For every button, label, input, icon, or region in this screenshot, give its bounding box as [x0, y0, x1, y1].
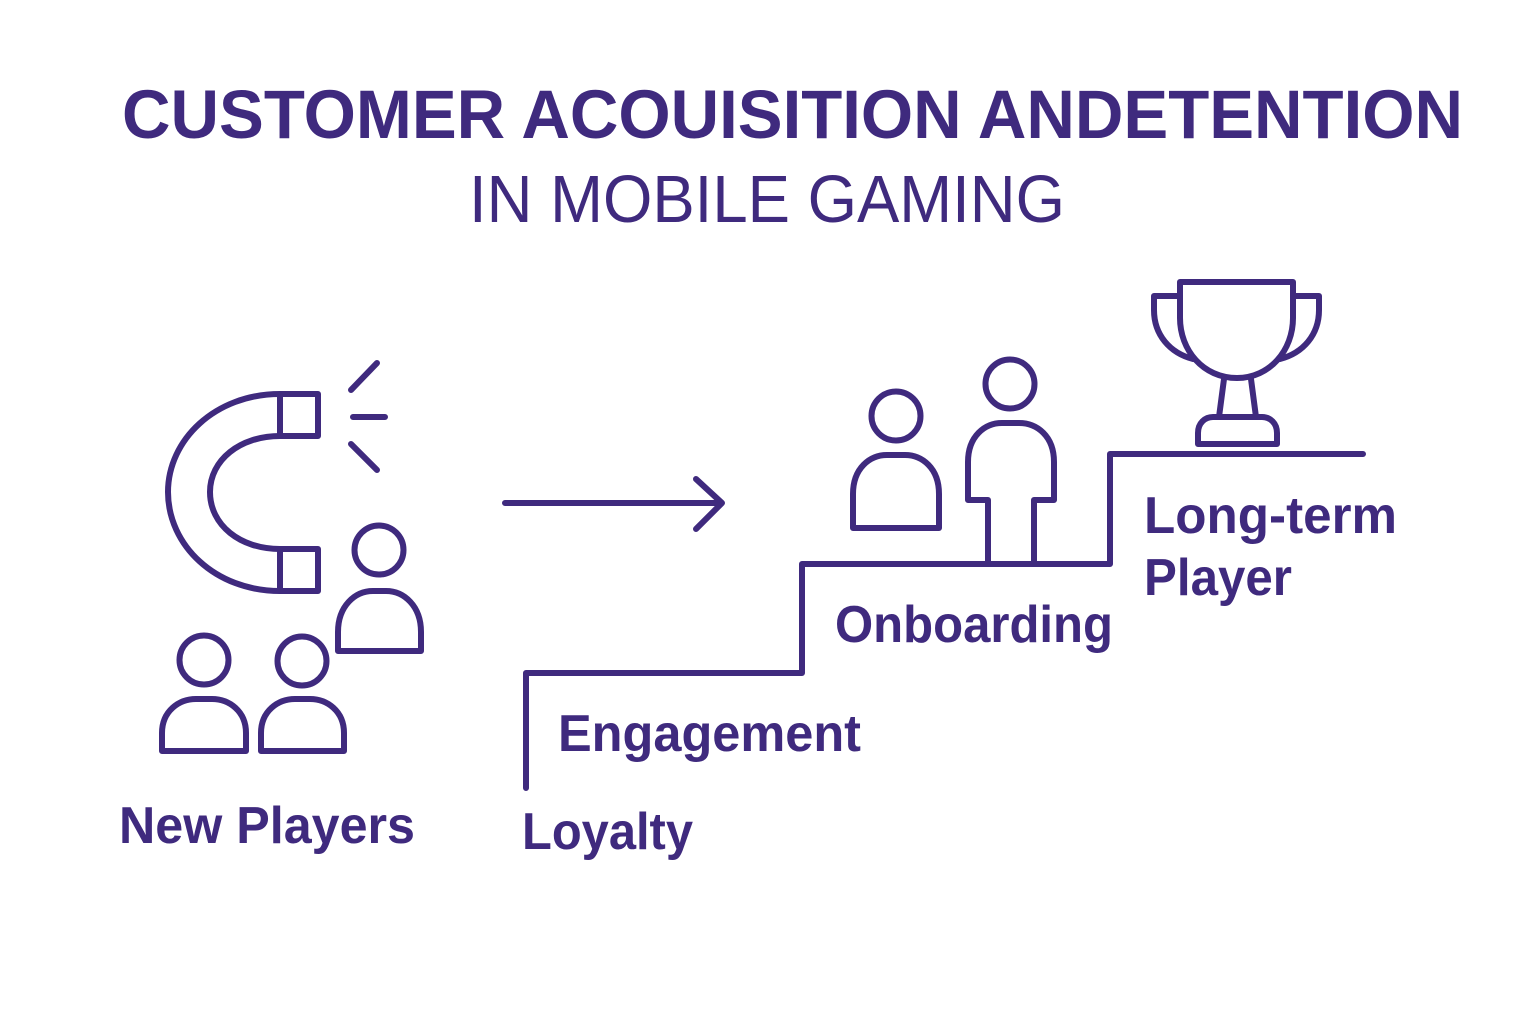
icon: seated player: [853, 392, 939, 528]
icon: standing player: [968, 360, 1054, 564]
label: long-term player: Long-term: [1144, 487, 1397, 545]
label: long-term player: Player: [1144, 549, 1292, 607]
panel: new players: [119, 363, 421, 855]
panel: player journey staircase: [522, 282, 1397, 861]
title: [122, 76, 1463, 237]
icon: player top right: [338, 526, 421, 651]
icon: player bottom left: [162, 636, 246, 751]
title line 1: CUSTOMER ACOUISITION ANDETENTION: [122, 76, 1463, 153]
label: new players: New Players: [119, 797, 415, 855]
title line 2: IN MOBILE GAMING: [469, 162, 1065, 237]
icon: magnet: [168, 394, 318, 591]
arrow: [505, 479, 722, 529]
icon: trophy: [1154, 282, 1319, 444]
icon: magnet attraction sparks: [351, 363, 385, 470]
label: long-term player: [1144, 487, 1397, 607]
label: loyalty: Loyalty: [522, 803, 693, 861]
label: onboarding: Onboarding: [835, 596, 1113, 654]
staircase line: [526, 454, 1363, 788]
label: engagement: Engagement: [558, 705, 861, 763]
icon: player bottom middle: [261, 636, 344, 751]
